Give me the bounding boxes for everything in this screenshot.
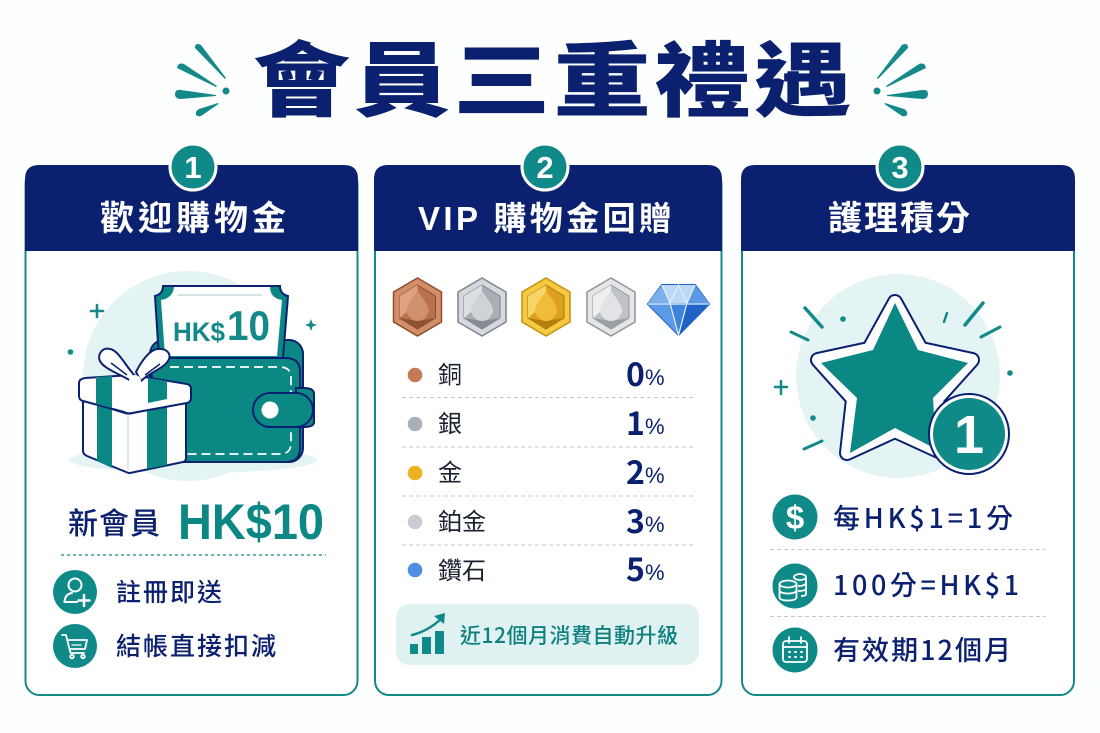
gift box	[79, 349, 191, 473]
step badge 1	[170, 144, 216, 190]
points badge: 1	[954, 405, 984, 465]
rule: redeem: 100分=HK$1	[833, 564, 1019, 603]
panel heading: 歡迎購物金	[100, 191, 286, 240]
rule: validity: 有效期12個月	[833, 629, 1011, 668]
voucher	[155, 286, 288, 358]
icon: left title sparkle	[175, 44, 230, 116]
icon: cart	[62, 635, 87, 658]
benefit: checkout: 結帳直接扣減	[116, 627, 276, 663]
tier row: diamond: 5	[626, 545, 645, 591]
icon: user plus	[64, 578, 90, 606]
tier row: platinum: 鉑金	[438, 502, 486, 537]
icon: silver medal	[458, 278, 506, 336]
tier row: silver	[408, 399, 665, 445]
panel header	[741, 165, 1075, 251]
panel heading: VIP 購物金回贈	[418, 200, 672, 237]
tier row: platinum: %	[645, 512, 665, 537]
rule: redeem	[772, 564, 1019, 608]
rule: earn: $	[786, 499, 804, 536]
step badge 3	[877, 144, 923, 190]
panel: VIP rebate	[374, 144, 722, 695]
tier row: gold: 金	[438, 453, 462, 488]
panel header	[374, 165, 722, 251]
icon: rising bar chart	[410, 613, 445, 654]
icon: diamond	[648, 285, 709, 335]
offer line: HK$10	[178, 494, 324, 550]
tier row: bronze: 0	[626, 350, 645, 396]
title: 會員三重禮遇	[253, 15, 851, 133]
callout: auto upgrade	[396, 604, 699, 665]
tier row: silver: 銀	[438, 404, 462, 439]
step badge 2	[522, 144, 568, 190]
icon: coins	[780, 574, 806, 600]
tier row: gold: 2	[626, 448, 645, 494]
rule: earn	[772, 494, 1013, 540]
panel header	[25, 165, 358, 251]
tier row: bronze	[408, 350, 665, 396]
icon: calendar	[783, 637, 807, 662]
benefit: checkout	[53, 624, 276, 668]
icon: platinum medal	[587, 278, 635, 336]
benefit: register	[53, 570, 222, 614]
panel: welcome credit	[25, 144, 358, 695]
panel heading: 護理積分	[828, 191, 970, 240]
tier row: bronze: 銅	[438, 355, 462, 390]
step badge 2: 2	[536, 150, 554, 185]
icon: gold medal	[522, 278, 570, 336]
tier row: gold	[408, 448, 665, 494]
offer line: 新會員	[68, 499, 160, 543]
step badge 1: 1	[184, 150, 202, 185]
voucher: HK$	[173, 317, 225, 347]
tier row: platinum: 3	[626, 497, 645, 543]
illustration: star with badge	[775, 274, 1013, 478]
step badge 3: 3	[891, 150, 909, 185]
panel: care points	[741, 144, 1075, 695]
icon: bronze medal	[394, 278, 442, 336]
tier row: gold: %	[645, 463, 665, 488]
tier row: diamond	[408, 545, 665, 591]
tier row: silver: 1	[626, 399, 645, 445]
tier row: platinum	[408, 497, 665, 543]
tier row: bronze: %	[645, 365, 665, 390]
points badge	[929, 394, 1009, 474]
tier row: silver: %	[645, 414, 665, 439]
rule: earn: 每HK$1=1分	[833, 497, 1013, 536]
icon: right title sparkle	[874, 44, 928, 116]
benefit: register: 註冊即送	[116, 573, 222, 609]
rule: validity	[772, 628, 1011, 672]
tier row: diamond: 鑽石	[438, 551, 486, 586]
tier row: diamond: %	[645, 560, 665, 585]
offer line	[68, 494, 324, 550]
callout: auto upgrade: 近12個月消費自動升級	[460, 620, 678, 650]
voucher: 10	[227, 302, 270, 349]
illustration: wallet, voucher and gift	[68, 271, 317, 481]
